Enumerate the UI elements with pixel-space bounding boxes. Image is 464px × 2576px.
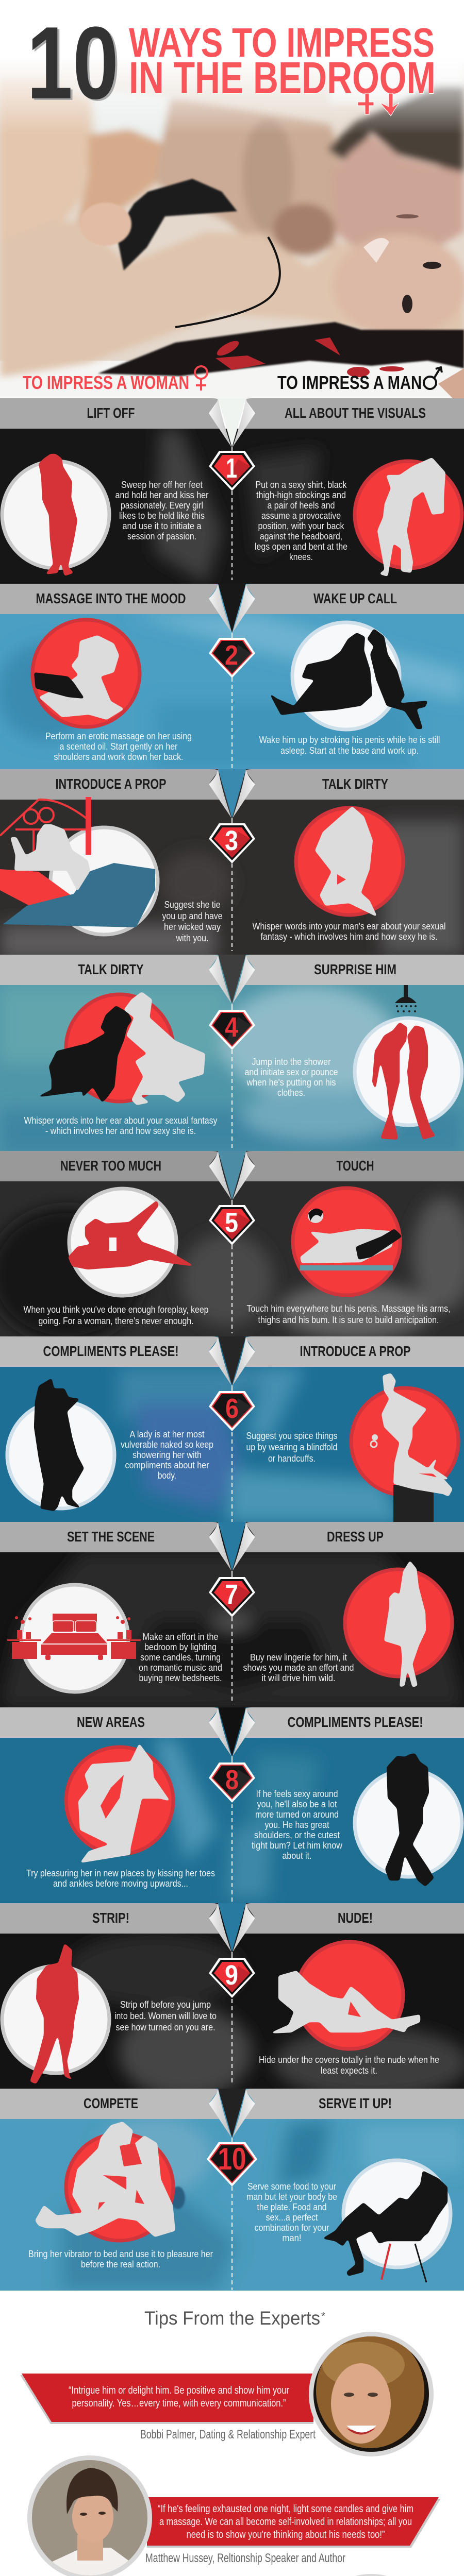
- heading: serve it up: SERVE IT UP!: [319, 2095, 392, 2111]
- left text: - which involves her and how sexy she is.: [45, 1126, 196, 1136]
- expert 2: Matthew Hussey: [27, 2455, 440, 2576]
- right text: man!: [283, 2233, 301, 2243]
- right text: or handcuffs.: [268, 1453, 316, 1464]
- heading: touch: TOUCH: [336, 1158, 374, 1174]
- icon: gender symbols under the O's: [358, 93, 399, 116]
- panel 7: [0, 1522, 464, 1707]
- quote text: a massage. We can all become self-involved in relationships; all you: [159, 2516, 412, 2528]
- left circle with standing couple: [7, 1378, 114, 1511]
- left circle with red figure: [68, 1189, 195, 1296]
- heading: wake up call: WAKE UP CALL: [313, 590, 397, 606]
- panel 7 background: [0, 1522, 464, 1707]
- dashed divider: [231, 2187, 233, 2290]
- badge 5: 5: [225, 1207, 238, 1238]
- left text: buying new bedsheets.: [139, 1673, 222, 1683]
- panel 10 background: [0, 2089, 464, 2291]
- header band: [0, 1903, 464, 1952]
- badge 7: 7: [225, 1579, 238, 1610]
- right text: thigh-high stockings and: [256, 490, 346, 500]
- right text: it will drive him wild.: [262, 1673, 335, 1683]
- right circle with figure and hands: [293, 1188, 402, 1295]
- right circle with woman in lingerie: [345, 1561, 452, 1687]
- attribution: Bobbi Palmer, Dating & Relationship Expert: [140, 2428, 316, 2442]
- arm at right: [438, 368, 464, 399]
- left text: likes to be held like this: [119, 511, 205, 521]
- header band: [0, 955, 464, 1004]
- badge 7: [209, 1571, 255, 1617]
- heading: surprise him: SURPRISE HIM: [314, 961, 396, 977]
- right text: Hide under the covers totally in the nude when he: [259, 2055, 439, 2065]
- badge 2: [209, 633, 255, 678]
- left text: Suggest she tie: [164, 900, 221, 910]
- right text: tight bum? Let him know: [252, 1840, 343, 1851]
- heading: introduce a prop: INTRODUCE A PROP: [56, 776, 166, 792]
- dashed divider: [231, 677, 233, 785]
- heading: compliments please: COMPLIMENTS PLEASE!: [43, 1343, 178, 1359]
- left text: and hold her and kiss her: [115, 490, 208, 500]
- heading: set the scene: SET THE SCENE: [67, 1529, 155, 1545]
- panel 8: [0, 1707, 464, 1909]
- right text: position, with your back: [258, 521, 344, 531]
- icon: male symbol: [424, 367, 442, 389]
- right text: [243, 1652, 354, 1683]
- left text: [24, 1115, 218, 1136]
- left text: shoulders and work down her back.: [54, 752, 184, 762]
- right circle with woman on chair: [322, 2160, 451, 2282]
- right text: Buy new lingerie for him, it: [250, 1652, 347, 1663]
- left circle with bed and candles: [7, 1585, 141, 1692]
- quote text: personality. Yes…every time, with every communication.”: [72, 2398, 286, 2409]
- right text: Jump into the shower: [252, 1057, 331, 1067]
- header band: [0, 1336, 464, 1385]
- left circle with couple: [66, 1743, 173, 1863]
- experts section heading: *: [321, 2311, 325, 2322]
- quote text: “If he's feeling exhausted one night, light some candles and give him: [158, 2503, 413, 2515]
- left text: Strip off before you jump: [120, 1999, 211, 2010]
- left text: body.: [158, 1470, 176, 1481]
- right circle with couple in shower: [355, 1018, 462, 1140]
- heading: introduce a prop: INTRODUCE A PROP: [300, 1343, 410, 1359]
- dashed divider: [231, 1999, 233, 2084]
- header band: [0, 2089, 464, 2138]
- right text: combination for your: [255, 2223, 329, 2233]
- panel 4 background: [0, 955, 464, 1151]
- left text: see how turned on you are.: [115, 2022, 216, 2032]
- left text: Try pleasuring her in new places by kissing her toes: [26, 1868, 215, 1878]
- heading: nude: NUDE!: [338, 1910, 373, 1926]
- right text: a pair of heels and: [267, 500, 335, 511]
- panel 2 background: [0, 584, 464, 769]
- panel 5 background: [0, 1151, 464, 1336]
- left text: Make an effort in the: [142, 1632, 219, 1642]
- left text: Perform an erotic massage on her using: [45, 731, 192, 741]
- right text: clothes.: [277, 1088, 305, 1098]
- left text: session of passion.: [127, 531, 196, 541]
- right text: you. He has great: [265, 1820, 329, 1830]
- header band: [0, 769, 464, 818]
- woman's hair: [98, 322, 464, 376]
- right text: [252, 1789, 343, 1861]
- dashed divider: [231, 1050, 233, 1156]
- header band: [0, 398, 464, 447]
- heading: new areas: NEW AREAS: [77, 1714, 145, 1730]
- left text: and use it to initiate a: [123, 521, 202, 531]
- heading: all about the visuals: ALL ABOUT THE VISUALS: [285, 405, 426, 421]
- right text: up by wearing a blindfold: [246, 1442, 337, 1452]
- panel 3 background: [0, 769, 464, 955]
- title: [27, 6, 436, 121]
- right circle with woman, box and handcuffs: [351, 1373, 458, 1522]
- portrait: [309, 2332, 434, 2458]
- right text: when he's putting on his: [246, 1077, 336, 1088]
- left circle with embracing couple: [2, 454, 109, 576]
- right text: about it.: [283, 1851, 311, 1861]
- right circle with whispering couple: [296, 806, 403, 917]
- panel 9 background: [0, 1903, 464, 2089]
- left text: [139, 1632, 222, 1683]
- right text: Suggest you spice things: [246, 1431, 337, 1441]
- pillow: [0, 869, 71, 906]
- right text: Serve some food to your: [247, 2181, 336, 2192]
- right text: you, he'll also be a lot: [257, 1799, 337, 1809]
- left circle with bed and tied figure: [0, 797, 158, 935]
- badge 2: 2: [225, 640, 238, 671]
- left text: and ankles before moving upwards...: [53, 1878, 188, 1889]
- dashed divider: [231, 1432, 233, 1538]
- left text: Sweep her off her feet: [121, 480, 203, 490]
- badge 3: [209, 818, 255, 863]
- header band: [0, 584, 464, 633]
- strap: [175, 237, 280, 327]
- quote text: [158, 2503, 413, 2540]
- lingerie: [116, 179, 237, 270]
- badge 1: [209, 447, 255, 491]
- left circle with massage silhouette: [32, 620, 140, 727]
- right text: thighs and his bum. It is sure to build anticipation.: [258, 1315, 439, 1325]
- left text: a scented oil. Start gently on her: [60, 741, 178, 752]
- badge 4: [209, 1004, 255, 1050]
- badge 9: 9: [225, 1960, 238, 1991]
- headboard: [0, 800, 89, 871]
- column heading: to impress a woman: TO IMPRESS A WOMAN: [23, 372, 189, 393]
- right text: asleep. Start at the base and work up.: [280, 745, 419, 756]
- right text: assume a provocative: [261, 511, 341, 521]
- header band: [0, 1151, 464, 1200]
- right circle with embracing couple: [355, 1753, 462, 1887]
- left text: [162, 900, 223, 943]
- header band: [0, 1707, 464, 1756]
- left circle with standing man: [2, 1943, 109, 2084]
- panel 5: [0, 1151, 464, 1342]
- badge 3: 3: [225, 825, 238, 856]
- right circle with seated couple: [269, 622, 428, 730]
- right text: [246, 1303, 451, 1325]
- experts section heading: Tips From the Experts: [144, 2308, 320, 2329]
- panel 4: [0, 955, 464, 1156]
- left text: [28, 2249, 213, 2269]
- badge 1: 1: [226, 453, 237, 484]
- panel 6: [0, 1336, 464, 1538]
- right text: [259, 735, 440, 756]
- right text: [246, 2181, 337, 2243]
- icon: female symbol: [195, 366, 207, 391]
- left circle with couple: [35, 2122, 175, 2241]
- right text: the plate. Food and: [257, 2202, 327, 2212]
- column heading: to impress a man: TO IMPRESS A MAN: [277, 372, 422, 393]
- right text: knees.: [289, 552, 313, 562]
- panel 10: [0, 2089, 464, 2291]
- expert 1: Bobbi Palmer: [20, 2332, 434, 2458]
- left text: Bring her vibrator to bed and use it to pleasure her: [28, 2249, 213, 2259]
- right text: and initiate sex or pounce: [244, 1067, 338, 1077]
- quote banner: [147, 2497, 440, 2548]
- left text: A lady is at her most: [130, 1429, 204, 1439]
- right text: [259, 2055, 439, 2076]
- left text: you up and have: [162, 911, 223, 921]
- left text: some candles, turning: [140, 1652, 221, 1663]
- left text: passionately. Every girl: [121, 500, 203, 511]
- panel 2: [0, 584, 464, 785]
- right text: more turned on around: [255, 1809, 339, 1820]
- right text: against the headboard,: [260, 531, 342, 541]
- hand: [80, 202, 131, 246]
- left circle with kneeling couple: [36, 992, 205, 1105]
- panel 1 background: [0, 429, 464, 584]
- right circle with posing woman: [355, 457, 462, 577]
- icon: shower head: [395, 985, 417, 1012]
- left text: [26, 1868, 215, 1889]
- badge 10: [207, 2138, 257, 2187]
- left text: [121, 1429, 213, 1481]
- heading: compete: COMPETE: [84, 2095, 138, 2111]
- dashed divider: [231, 1804, 233, 1909]
- dashed divider: [231, 863, 233, 951]
- figure: [10, 824, 90, 891]
- heading: talk dirty: TALK DIRTY: [322, 776, 388, 792]
- bedside tables and candles: [7, 1616, 141, 1659]
- hero photo: couple on bed: [0, 69, 464, 399]
- right text: [255, 480, 347, 562]
- heading: talk dirty: TALK DIRTY: [78, 961, 144, 977]
- right text: man but let your body be: [246, 2192, 337, 2202]
- quote text: need is to show you're thinking about his needs too!”: [187, 2529, 385, 2540]
- left text: into bed. Women will love to: [114, 2011, 217, 2021]
- right circle with reclining woman: [269, 1942, 420, 2049]
- right text: Wake him up by stroking his penis while he is still: [259, 735, 440, 745]
- panel 6 background: [0, 1336, 464, 1522]
- faces detail: [402, 262, 441, 313]
- badge 8: [209, 1756, 255, 1803]
- quote banner: [20, 2374, 313, 2424]
- panel 1: [0, 398, 464, 584]
- right text: shows you made an effort and: [243, 1663, 354, 1673]
- quote text: [69, 2385, 289, 2409]
- left text: [24, 1304, 208, 1326]
- badge 5: [209, 1200, 255, 1245]
- header band: [0, 1522, 464, 1571]
- right text: If he feels sexy around: [256, 1789, 338, 1799]
- left text: with you.: [176, 933, 208, 943]
- heading: lift off: LIFT OFF: [87, 405, 135, 421]
- panel 9: [0, 1903, 464, 2099]
- left text: her wicked way: [164, 922, 221, 932]
- panel 3: [0, 769, 464, 960]
- badge 4: 4: [225, 1012, 238, 1043]
- right text: legs open and bent at the: [255, 541, 347, 552]
- dashed divider: [231, 1617, 233, 1704]
- right text: least expects it.: [321, 2065, 377, 2076]
- left text: before the real action.: [81, 2259, 160, 2269]
- left text: Whisper words into her ear about your sexual fantasy: [24, 1115, 218, 1126]
- left text: vulverable naked so keep: [121, 1439, 213, 1450]
- portrait: [27, 2455, 152, 2576]
- badge 10: 10: [218, 2142, 246, 2176]
- attribution: Matthew Hussey, Reltionship Speaker and Author: [145, 2551, 345, 2565]
- badge 8: 8: [225, 1765, 239, 1795]
- heading: strip: STRIP!: [92, 1910, 129, 1926]
- right text: Put on a sexy shirt, black: [256, 480, 347, 490]
- left text: When you think you've done enough foreplay, keep: [24, 1304, 208, 1315]
- right text: [244, 1057, 338, 1098]
- left text: showering her with: [132, 1450, 202, 1460]
- blanket: [3, 863, 155, 927]
- left text: [115, 480, 208, 541]
- right text: sex...a perfect: [266, 2212, 318, 2223]
- badge 9: [209, 1952, 255, 1998]
- dashed divider: [231, 491, 233, 580]
- left text: going. For a woman, there's never enough.: [38, 1316, 194, 1326]
- right text: fantasy - which involves him and how sexy he is.: [261, 931, 437, 942]
- heading: never too much: NEVER TOO MUCH: [60, 1158, 161, 1174]
- heading: compliments please: COMPLIMENTS PLEASE!: [288, 1714, 423, 1730]
- badge 6: [209, 1385, 255, 1431]
- quote text: “Intrigue him or delight him. Be positive and show him your: [69, 2385, 289, 2396]
- dashed divider: [231, 1245, 233, 1333]
- badge 6: 6: [225, 1393, 239, 1424]
- portrait: [356, 2574, 387, 2576]
- heading: dress up: DRESS UP: [327, 1529, 384, 1545]
- heading: massage into the mood: MASSAGE INTO THE MOOD: [36, 590, 186, 606]
- left text: on romantic music and: [139, 1663, 222, 1673]
- right text: [246, 1431, 337, 1464]
- panel 8 background: [0, 1707, 464, 1903]
- left text: [114, 1999, 217, 2032]
- bed: [41, 1614, 107, 1660]
- right text: [253, 921, 445, 942]
- right text: shoulders, or the cutest: [254, 1830, 340, 1840]
- numeral 10: 10: [27, 6, 119, 121]
- left text: compliments about her: [125, 1460, 209, 1470]
- left text: bedroom by lighting: [144, 1642, 217, 1652]
- expert 3: Rachel DeAlto: [356, 2574, 387, 2576]
- petals: [215, 337, 404, 377]
- left text: [45, 731, 192, 762]
